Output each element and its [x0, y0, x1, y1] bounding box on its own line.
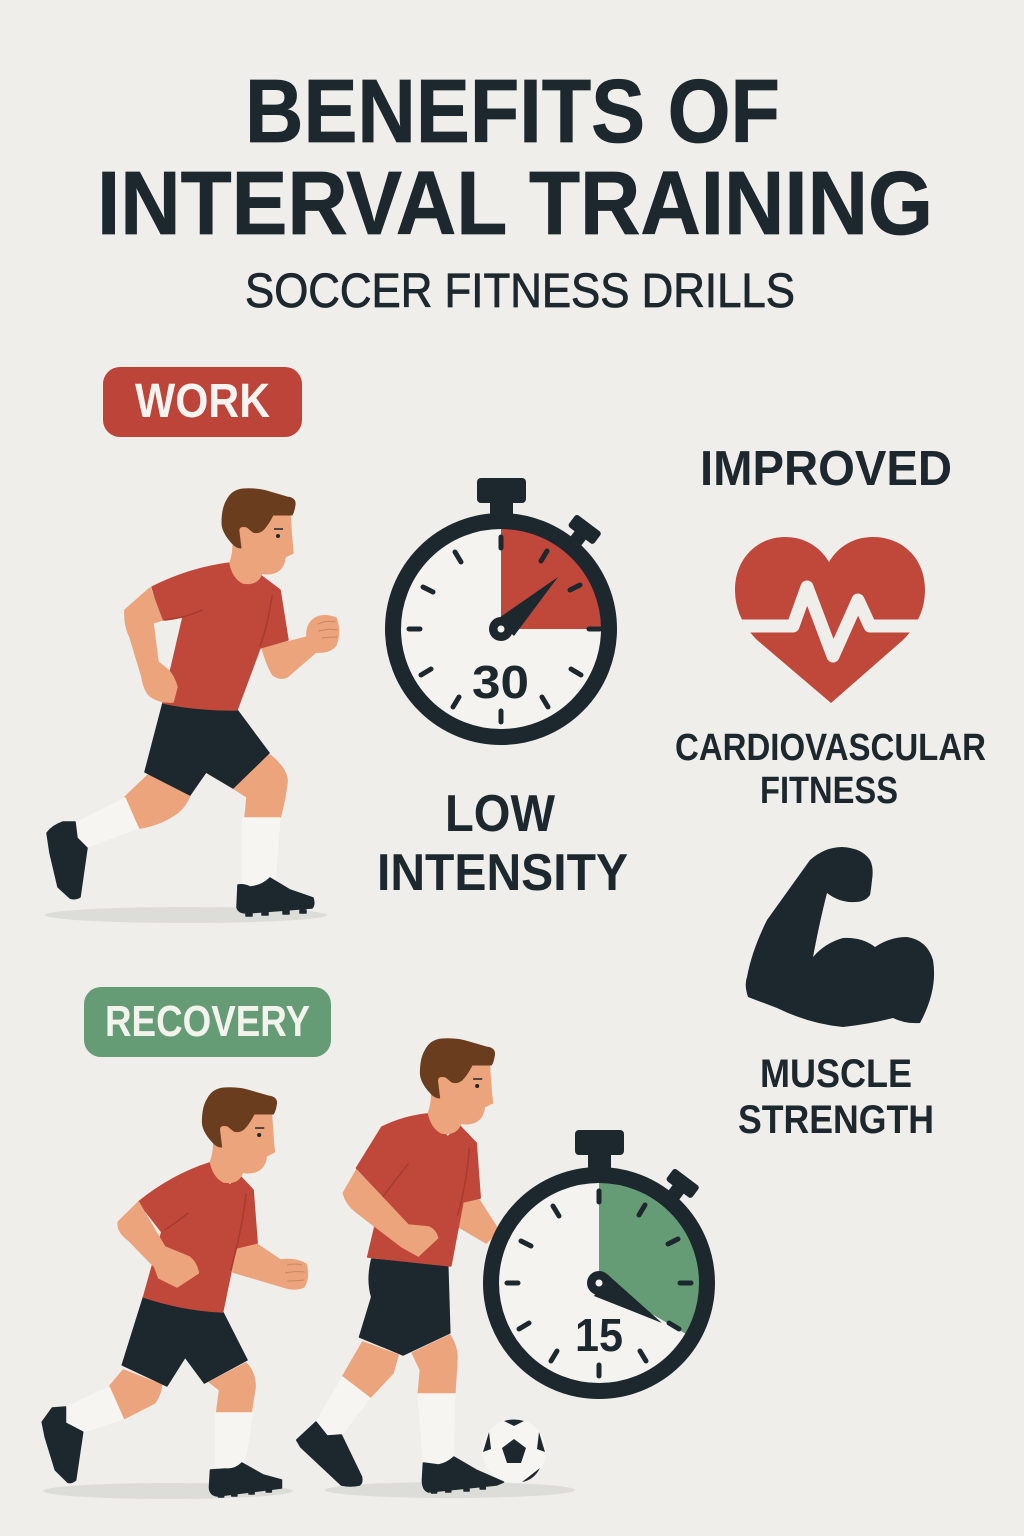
title [97, 62, 933, 254]
badge: recovery: RECOVERY [105, 997, 310, 1046]
label: low intensity: INTENSITY [377, 844, 628, 902]
label: cardiovascular fitness [675, 727, 986, 812]
stopwatch: work 30 [393, 478, 609, 737]
icon: heart with pulse [730, 537, 930, 703]
title: BENEFITS OF [245, 62, 780, 162]
head [202, 1088, 277, 1182]
figure: recovery runner [42, 1088, 307, 1497]
badge: work: WORK [135, 375, 270, 428]
badge: work [103, 367, 302, 437]
badge: recovery [84, 987, 331, 1057]
label: low intensity [377, 785, 628, 902]
ground shadows [43, 1482, 575, 1499]
number 15: 15 [575, 1309, 623, 1361]
head [420, 1039, 495, 1133]
label: muscle strength [738, 1052, 934, 1142]
head [222, 489, 295, 583]
label: cardiovascular fitness: FITNESS [760, 770, 898, 812]
label: muscle strength: MUSCLE [760, 1052, 912, 1096]
icon: flexed bicep [746, 847, 934, 1027]
label: low intensity: LOW [445, 785, 556, 843]
label: muscle strength: STRENGTH [738, 1098, 934, 1142]
label: cardiovascular fitness: CARDIOVASCULAR [675, 727, 986, 769]
stopwatch: recovery 15 [491, 1130, 707, 1391]
figure: work runner [45, 489, 338, 923]
title: INTERVAL TRAINING [97, 154, 933, 254]
soccer ball [482, 1419, 546, 1483]
number 30: 30 [472, 656, 529, 708]
heading: improved: IMPROVED [700, 442, 952, 496]
subtitle: SOCCER FITNESS DRILLS [245, 265, 795, 318]
figure: recovery walker [297, 1039, 504, 1493]
